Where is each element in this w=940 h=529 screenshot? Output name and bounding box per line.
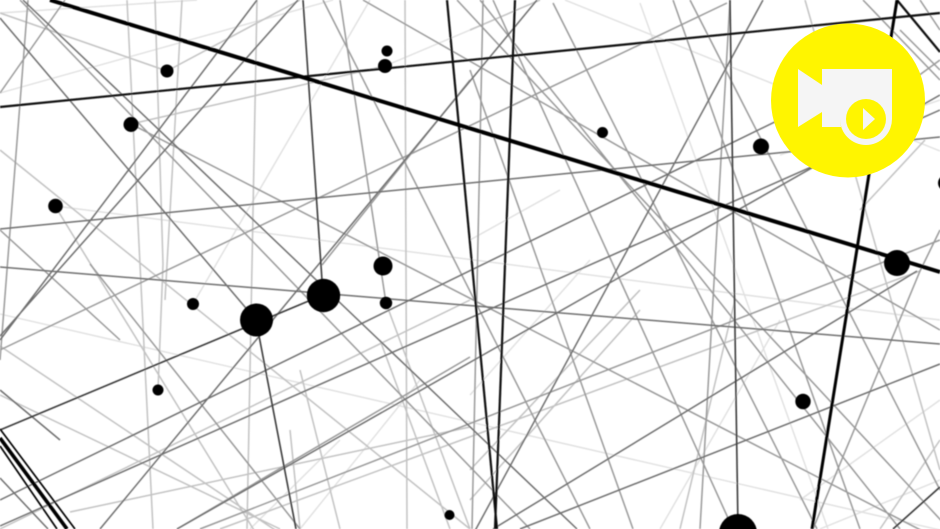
icon: play button bbox=[846, 99, 886, 139]
video badge bbox=[771, 24, 925, 178]
icon: video camera bbox=[798, 69, 892, 145]
badge circle bbox=[771, 24, 925, 178]
